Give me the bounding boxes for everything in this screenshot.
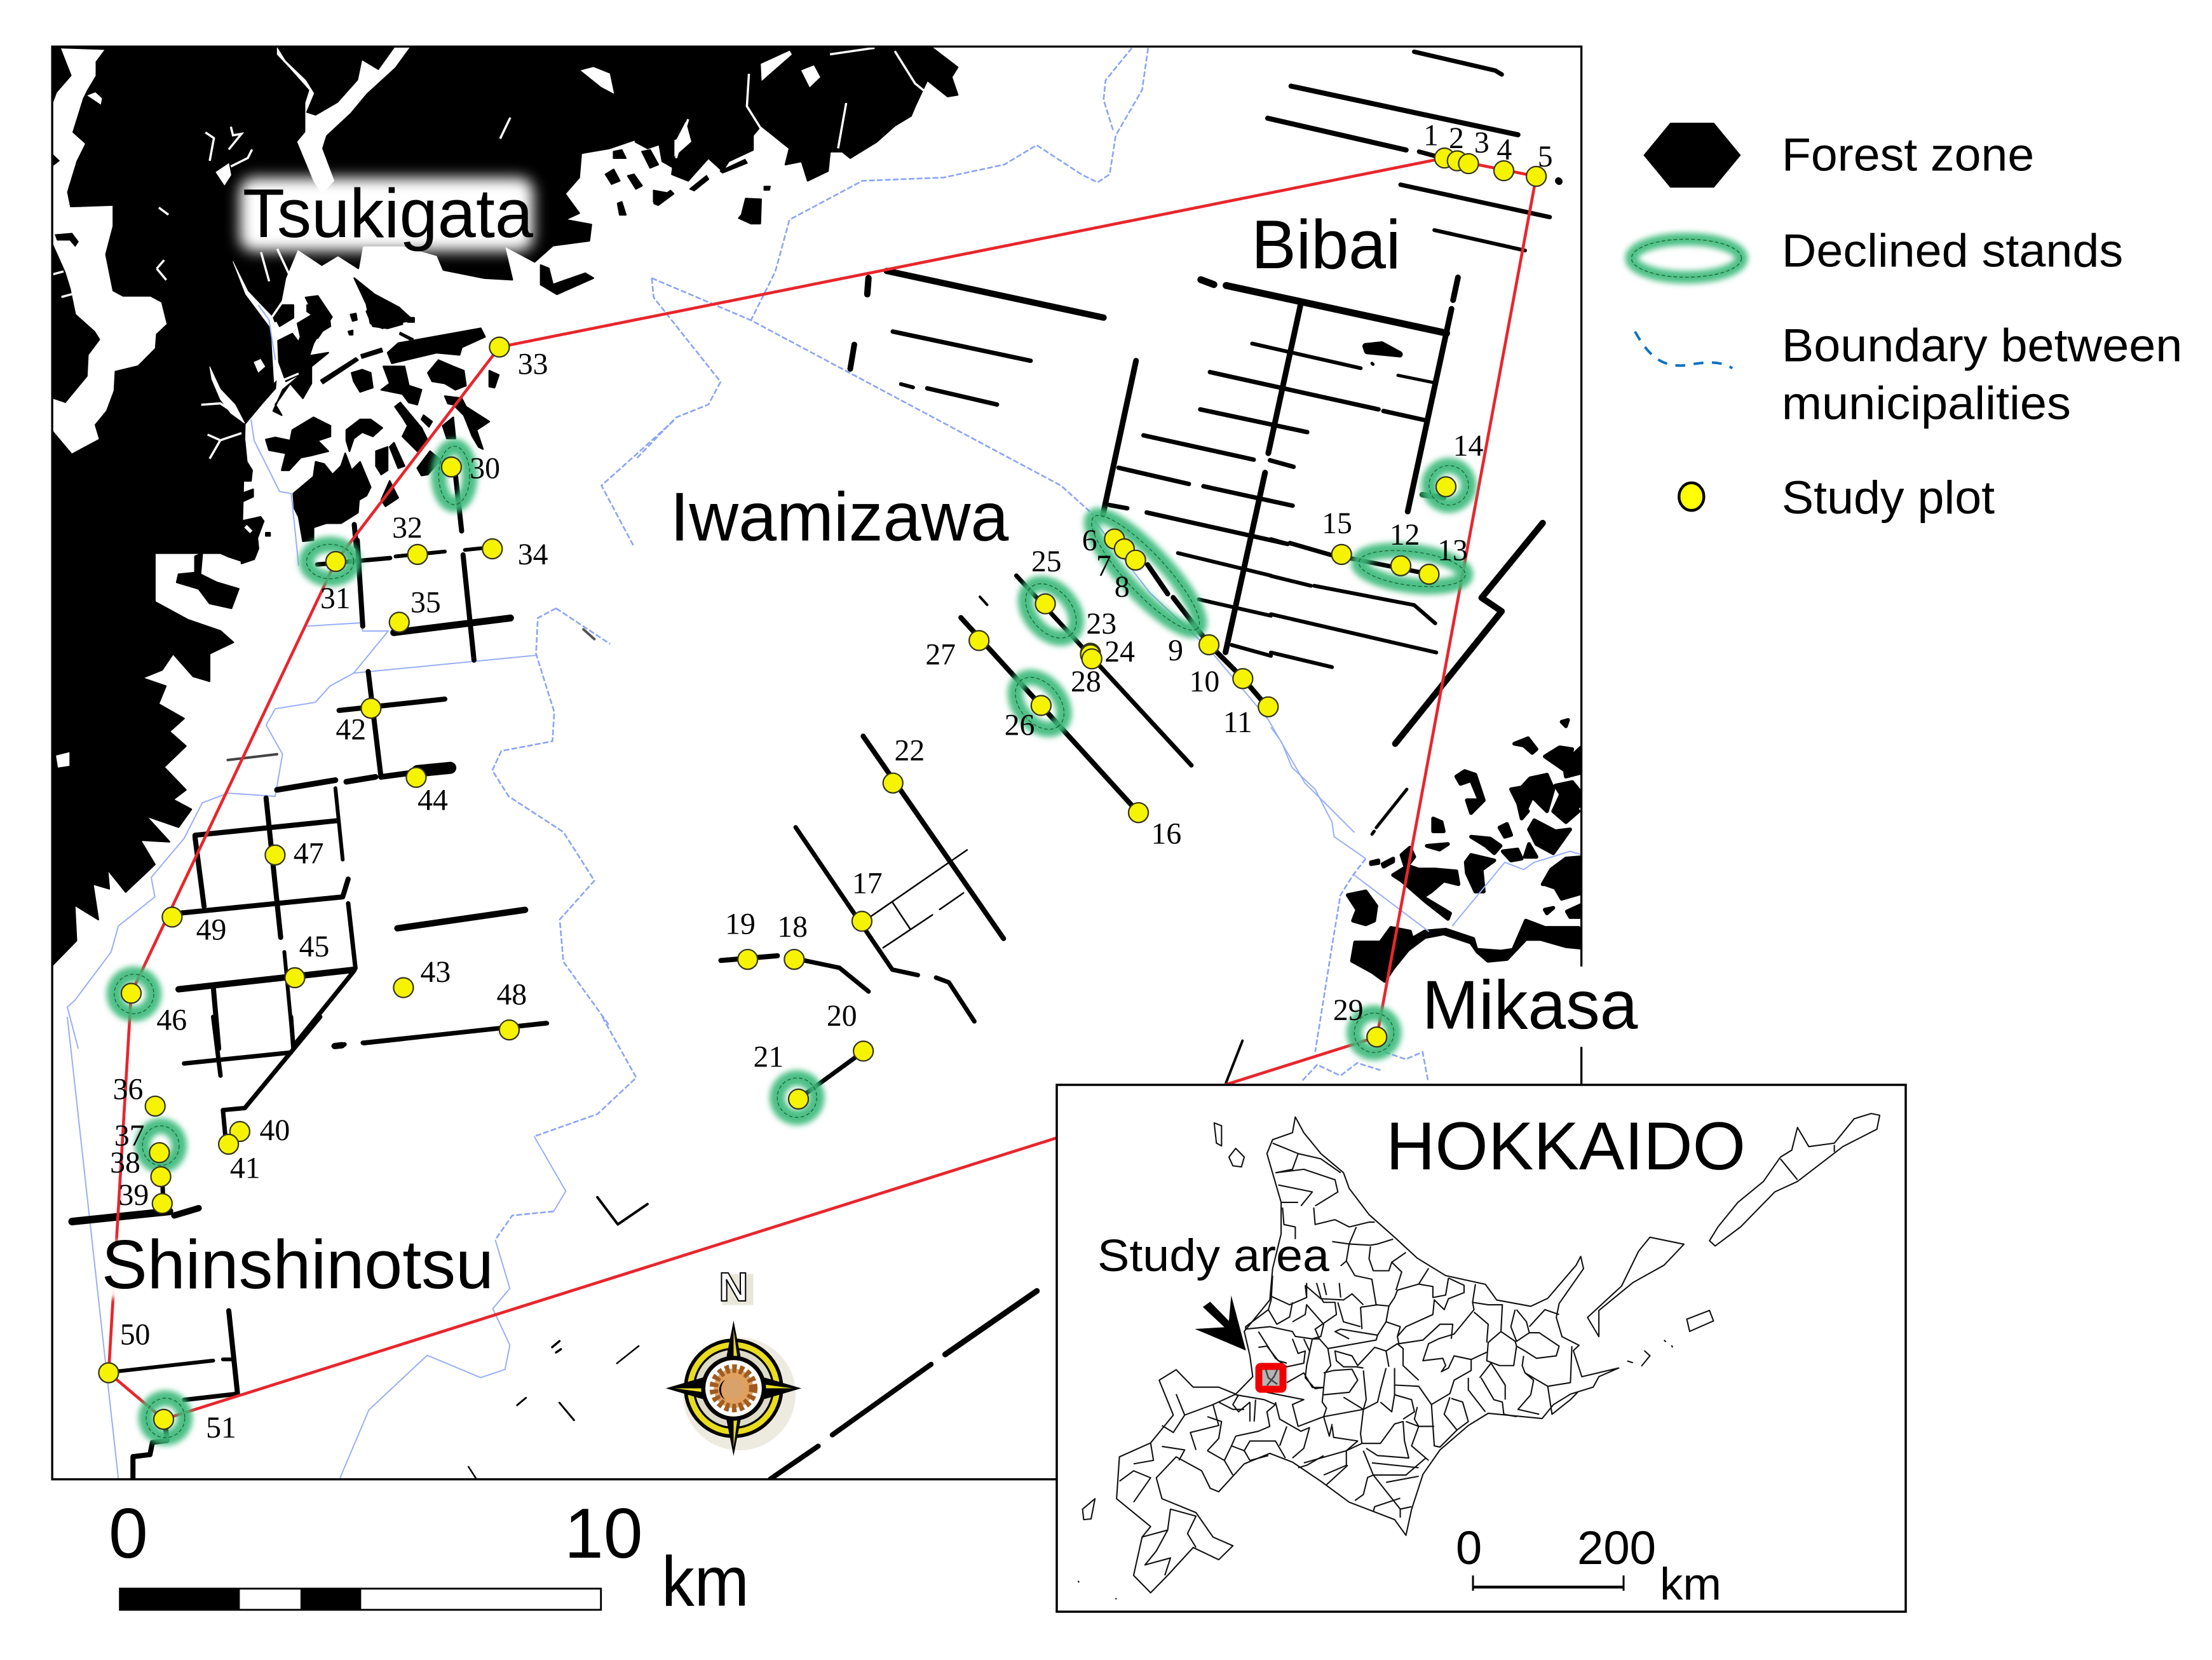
place name: Iwamizawa: Iwamizawa (670, 479, 1009, 555)
study plot numbers: 38 (110, 1146, 140, 1180)
study plot numbers: 17 (852, 866, 883, 900)
map frame (52, 46, 1582, 1480)
study plot connecting polygon (109, 158, 1537, 1419)
legend: municipal boundary: municipalities (1782, 377, 2071, 429)
study plot numbers: 3 (1474, 126, 1489, 160)
legend: forest zone (1643, 123, 2034, 187)
study plot numbers: 22 (894, 734, 925, 768)
declined stands (114, 446, 1469, 1438)
study plot numbers: 10 (1189, 665, 1219, 698)
forest clearings and rivers (53, 48, 927, 767)
legend: forest zone: Forest zone (1782, 129, 2034, 181)
study plot numbers: 23 (1086, 607, 1116, 641)
arrow to study area (1195, 1295, 1246, 1350)
study plot numbers: 28 (1071, 665, 1101, 698)
study plot numbers: 41 (230, 1152, 261, 1185)
panel: study area map (49, 47, 1587, 1479)
legend: municipal boundary (1635, 319, 2182, 429)
study plot numbers: 18 (777, 910, 808, 944)
study plot numbers: 26 (1005, 709, 1035, 742)
study plot numbers: 21 (753, 1040, 784, 1073)
study plot numbers (110, 119, 1553, 1445)
place name: Tsukigata: Tsukigata (243, 175, 534, 252)
study plot numbers: 33 (518, 347, 548, 381)
inset scale bar (1456, 1521, 1721, 1610)
legend: municipal boundary: Boundary between (1782, 319, 2182, 371)
study plot numbers: 37 (114, 1119, 145, 1153)
study plot numbers: 51 (206, 1411, 236, 1445)
legend: declined stands (1631, 225, 2123, 277)
place name: Mikasa: Mikasa (1422, 967, 1638, 1044)
study plot numbers: 47 (294, 837, 323, 871)
label: Study area: Study area (1097, 1231, 1330, 1281)
main scale bar (109, 1494, 749, 1621)
study plot numbers: 32 (392, 511, 423, 545)
study plot numbers: 34 (518, 538, 548, 571)
main scale bar: 0 (109, 1494, 148, 1573)
main scale bar: km (662, 1542, 749, 1621)
study plot numbers: 30 (470, 452, 500, 486)
legend (1631, 123, 2182, 524)
study plot numbers: 14 (1453, 429, 1483, 463)
study plot numbers: 15 (1322, 507, 1352, 540)
study plot numbers: 4 (1496, 133, 1512, 167)
study plot numbers: 7 (1096, 549, 1111, 583)
place name: Bibai: Bibai (1251, 207, 1401, 283)
study plot numbers: 19 (725, 908, 756, 941)
road network (72, 51, 1559, 1479)
study plot numbers: 36 (113, 1072, 143, 1106)
study plot numbers: 12 (1390, 518, 1420, 552)
municipal boundaries (492, 48, 1428, 1240)
place name: Shinshinotsu: Shinshinotsu (102, 1227, 494, 1303)
locator square (1259, 1366, 1283, 1389)
study plot numbers: 42 (336, 712, 366, 746)
study plot numbers: 9 (1168, 634, 1183, 667)
study plot numbers: 48 (496, 978, 527, 1012)
study plot numbers: 20 (827, 999, 857, 1033)
study plot numbers: 2 (1449, 121, 1464, 155)
study plot numbers: 24 (1104, 635, 1135, 669)
legend: study plot (1679, 472, 1995, 524)
study plot numbers: 43 (421, 955, 451, 989)
study plot numbers: 6 (1082, 524, 1097, 557)
legend: declined stands: Declined stands (1782, 225, 2123, 277)
study plot numbers: 11 (1223, 705, 1252, 739)
study plot numbers: 31 (320, 582, 351, 615)
study plot numbers: 1 (1423, 119, 1439, 153)
Hokkaido outline and municipalities (1078, 1113, 1880, 1599)
study plot numbers: 27 (925, 638, 956, 672)
inset scale bar: 200 (1577, 1521, 1656, 1574)
study plot numbers: 46 (156, 1003, 187, 1037)
study plot numbers: 25 (1031, 545, 1062, 578)
inset scale bar: km (1660, 1560, 1721, 1610)
title: HOKKAIDO: HOKKAIDO (1386, 1108, 1746, 1184)
study plot numbers: 16 (1151, 817, 1181, 851)
inset scale bar: 0 (1456, 1521, 1482, 1574)
inset: Hokkaido locator map (1057, 1085, 1906, 1612)
main scale bar: 10 (564, 1494, 642, 1573)
study plot numbers: 8 (1115, 570, 1130, 604)
study plot numbers: 39 (118, 1178, 149, 1212)
study plot numbers: 40 (259, 1113, 290, 1147)
study plot numbers: 35 (411, 585, 441, 619)
study plot numbers: 5 (1538, 140, 1553, 173)
study plot numbers: 29 (1333, 993, 1364, 1027)
study plot markers (98, 148, 1546, 1429)
study plot numbers: 13 (1437, 533, 1468, 567)
legend: study plot: Study plot (1782, 472, 1995, 524)
study plot numbers: 50 (120, 1318, 150, 1352)
compass rose: N (719, 1264, 749, 1310)
study plot numbers: 45 (299, 930, 329, 963)
forest zone (49, 47, 1587, 981)
study plot numbers: 44 (417, 783, 448, 817)
study plot numbers: 49 (196, 913, 226, 947)
compass rose (666, 1264, 801, 1456)
